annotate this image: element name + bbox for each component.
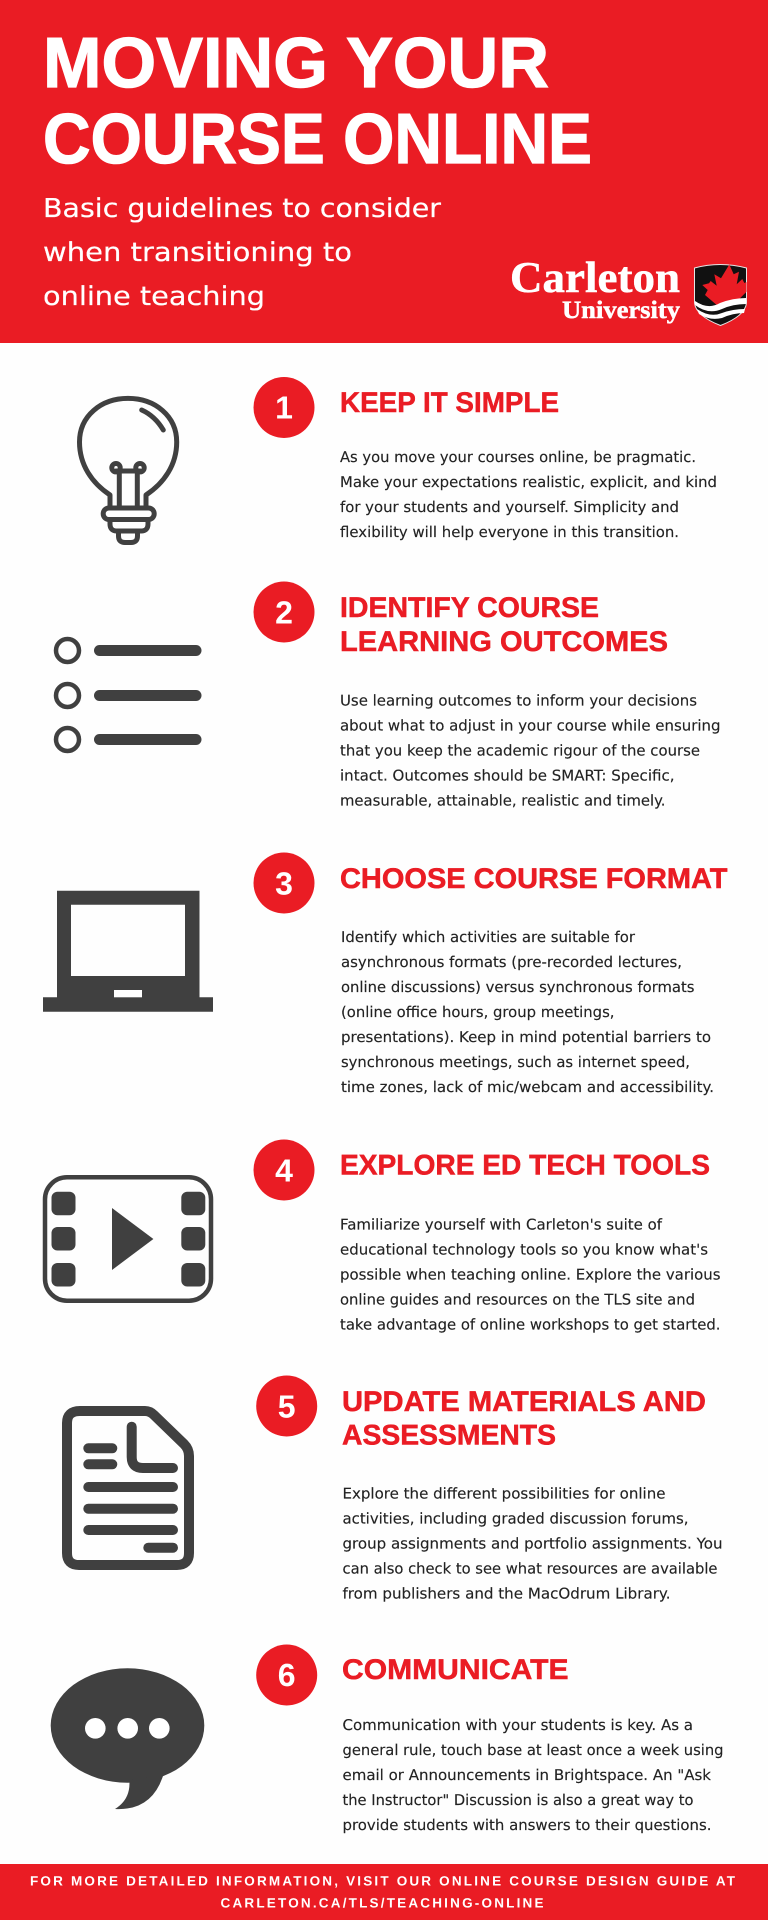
body text: activities, including graded discussion forums,: [342, 1510, 688, 1528]
icon: document: [67, 1411, 189, 1565]
body text: from publishers and the MacOdrum Library.: [342, 1586, 670, 1602]
icon: laptop: [43, 891, 213, 1012]
body text: group assignments and portfolio assignments. You: [342, 1536, 722, 1552]
panel: step 1 keep it simple: [80, 377, 717, 542]
number badge 4: 4: [275, 1152, 293, 1188]
body text: email or Announcements in Brightspace. An "Ask: [342, 1767, 711, 1784]
logo: Carleton University wordmark: University: [562, 297, 681, 324]
body text: Use learning outcomes to inform your decisions: [340, 692, 697, 710]
body text: Make your expectations realistic, explicit, and kind: [340, 474, 717, 491]
panel: step 4 explore tools: [45, 1140, 720, 1334]
number badge 3: 3: [275, 866, 293, 902]
number badge 6: [256, 1644, 317, 1706]
title: COURSE ONLINE: [43, 100, 592, 179]
body text: As you move your courses online, be pragmatic.: [340, 449, 696, 466]
logo: shield crest: [694, 264, 746, 326]
number badge 3: [254, 852, 314, 914]
body text: general rule, touch base at least once a week using: [342, 1742, 724, 1759]
subtitle: online teaching: [43, 282, 265, 312]
body text: Communication with your students is key. As a: [342, 1717, 693, 1734]
body text: online guides and resources on the TLS site and: [340, 1292, 695, 1308]
body text: (online office hours, group meetings,: [341, 1004, 614, 1021]
heading: [342, 1386, 706, 1452]
heading: CHOOSE COURSE FORMAT: [340, 863, 728, 895]
footer call to action: FOR MORE DETAILED INFORMATION, VISIT OUR ONLINE COURSE DESIGN GUIDE AT: [30, 1874, 736, 1888]
logo: Carleton University wordmark: [510, 253, 681, 324]
body text: possible when teaching online. Explore the various: [340, 1266, 720, 1284]
title: MOVING YOUR: [43, 24, 549, 103]
panel: step 3 choose format: [43, 852, 728, 1096]
number badge 1: 1: [275, 390, 293, 426]
body text: educational technology tools so you know what's: [340, 1242, 708, 1258]
heading: KEEP IT SIMPLE: [340, 387, 559, 419]
logo: Carleton University wordmark: Carleton: [510, 253, 680, 302]
body text: time zones, lack of mic/webcam and accessibility.: [341, 1079, 714, 1096]
body text: [341, 929, 714, 1096]
footer call to action: CARLETON.CA/TLS/TEACHING-ONLINE: [220, 1896, 544, 1910]
number badge 5: 5: [278, 1388, 296, 1424]
subtitle: when transitioning to: [43, 238, 352, 268]
number badge 6: 6: [278, 1657, 296, 1693]
body text: for your students and yourself. Simplicity and: [340, 499, 679, 516]
body text: [342, 1717, 724, 1834]
title: [43, 24, 592, 179]
number badge 2: [254, 582, 314, 642]
body text: [340, 449, 717, 541]
number badge 4: [254, 1140, 314, 1200]
body text: [340, 692, 720, 810]
body text: the Instructor" Discussion is also a great way to: [342, 1792, 694, 1809]
icon: film strip with play button: [45, 1177, 211, 1301]
subtitle: Basic guidelines to consider: [43, 194, 441, 224]
subtitle: [43, 194, 441, 312]
icon: light bulb: [80, 398, 177, 542]
panel: header: [0, 0, 768, 343]
heading: ASSESSMENTS: [342, 1420, 556, 1452]
heading: [340, 592, 668, 658]
body text: [340, 1216, 720, 1334]
body text: Identify which activities are suitable for: [341, 929, 636, 946]
number badge 1: [254, 377, 314, 438]
body text: measurable, attainable, realistic and timely.: [340, 792, 666, 810]
footer call to action: [30, 1874, 736, 1910]
heading: EXPLORE ED TECH TOOLS: [340, 1150, 710, 1182]
icon: checklist: [56, 639, 202, 751]
number badge 2: 2: [275, 594, 293, 630]
body text: take advantage of online workshops to get started.: [340, 1316, 720, 1334]
panel: step 5 update materials: [67, 1376, 722, 1602]
body text: about what to adjust in your course while ensuring: [340, 718, 720, 734]
body text: asynchronous formats (pre-recorded lectures,: [341, 954, 682, 971]
body text: Familiarize yourself with Carleton's suite of: [340, 1216, 663, 1234]
body text: [342, 1486, 722, 1602]
heading: IDENTIFY COURSE: [340, 592, 599, 624]
heading: LEARNING OUTCOMES: [340, 626, 668, 658]
panel: step 2 identify outcomes: [56, 582, 720, 810]
body text: can also check to see what resources are available: [342, 1560, 718, 1578]
body text: online discussions) versus synchronous formats: [341, 979, 694, 996]
heading: UPDATE MATERIALS AND: [342, 1386, 706, 1418]
icon: speech bubble: [51, 1668, 204, 1809]
panel: step 6 communicate: [51, 1644, 723, 1834]
heading: COMMUNICATE: [342, 1654, 568, 1686]
body text: flexibility will help everyone in this transition.: [340, 524, 679, 541]
body text: presentations). Keep in mind potential barriers to: [341, 1029, 711, 1046]
panel: footer: [0, 1864, 768, 1920]
body text: synchronous meetings, such as internet speed,: [341, 1054, 690, 1071]
number badge 5: [256, 1376, 317, 1436]
body text: provide students with answers to their questions.: [342, 1817, 712, 1834]
body text: intact. Outcomes should be SMART: Specific,: [340, 768, 674, 784]
body text: that you keep the academic rigour of the course: [340, 742, 700, 760]
body text: Explore the different possibilities for online: [342, 1486, 666, 1502]
